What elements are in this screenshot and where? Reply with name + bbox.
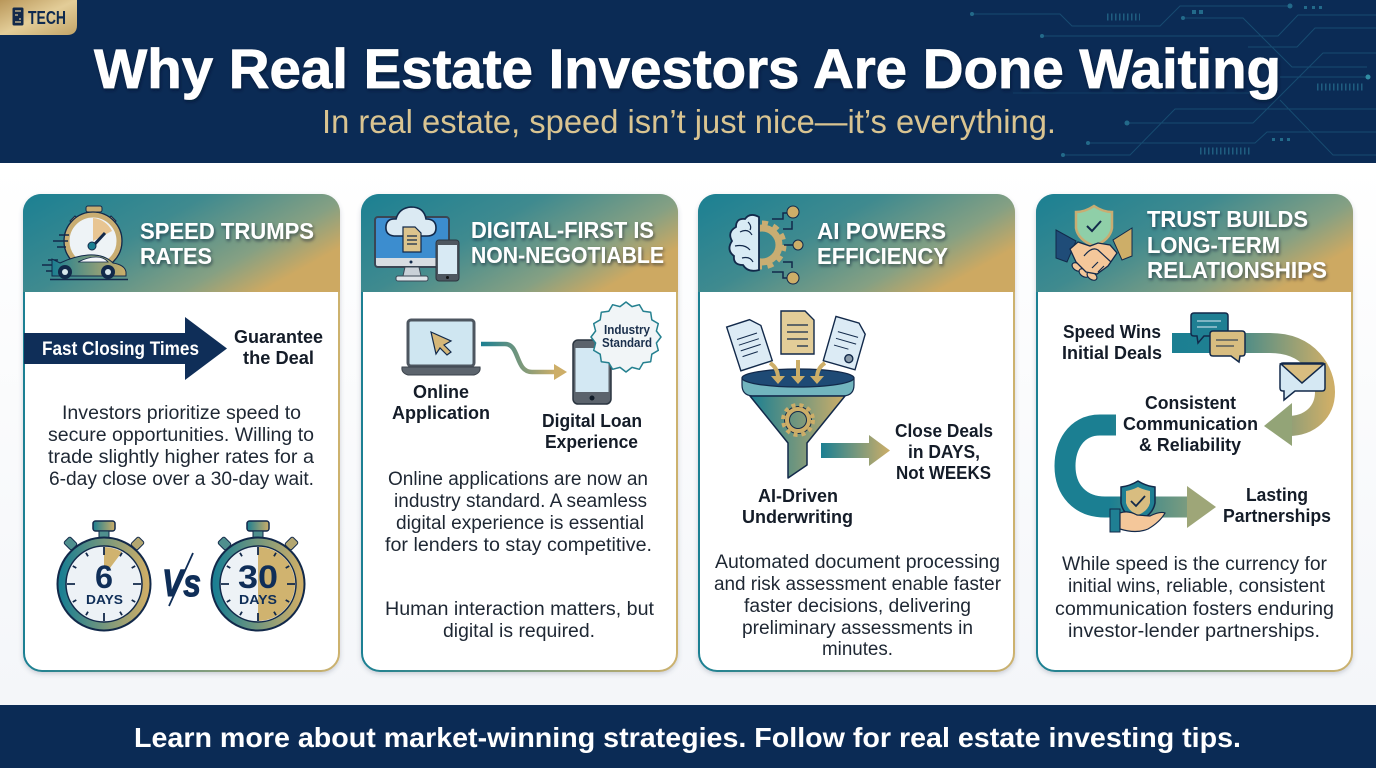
icon: shield and handshake — [1056, 206, 1132, 282]
body text: Automated document processing — [715, 552, 1000, 573]
body text: human interaction — [385, 599, 655, 642]
body text: trade slightly higher rates for a — [48, 447, 314, 468]
label: digital loan experience: Experience — [545, 432, 638, 452]
arrow: fast closing times: Fast Closing Times — [42, 339, 199, 360]
body text: and risk assessment enable faster — [714, 574, 1002, 595]
heading — [817, 218, 948, 269]
body text: While speed is the currency for — [1062, 554, 1328, 575]
stopwatch: 30 days: 30 — [238, 559, 278, 595]
label: speed wins initial deals: Speed Wins — [1063, 322, 1161, 342]
label: close deals: Close Deals — [895, 421, 993, 441]
arrow: online to digital — [481, 344, 567, 380]
label: ai-driven underwriting — [742, 486, 853, 527]
tech badge — [0, 0, 77, 35]
label: guarantee the deal: the Deal — [243, 348, 314, 368]
body text: Online applications are now an — [388, 469, 648, 490]
icon: envelope — [1280, 363, 1325, 400]
badge: industry standard: Standard — [602, 336, 652, 350]
body text: Investors prioritize speed to — [62, 403, 301, 424]
heading — [140, 218, 314, 269]
body text: faster decisions, delivering — [744, 596, 971, 617]
body text: investor-lender partnerships. — [1068, 621, 1320, 642]
label: speed wins initial deals — [1062, 322, 1162, 363]
icon: laptop — [402, 320, 480, 375]
stopwatch: 30 days — [212, 521, 304, 630]
arrow: speed to communication — [1172, 343, 1325, 446]
vs mark: Vs — [162, 563, 201, 605]
heading: AI POWERS — [817, 218, 946, 244]
icon: shield in hand — [1110, 481, 1165, 532]
label: consistent communication: Consistent — [1145, 393, 1236, 413]
body text: preliminary assessments in — [742, 618, 973, 639]
stopwatch: 6 days: 6 — [95, 559, 113, 595]
tech badge: TECH — [28, 8, 66, 28]
arrows into funnel — [770, 360, 825, 384]
header banner — [0, 0, 1376, 163]
heading: LONG-TERM — [1147, 232, 1280, 258]
icon: documents — [727, 311, 868, 371]
label: ai-driven underwriting: AI-Driven — [758, 486, 838, 506]
label: ai-driven underwriting: Underwriting — [742, 507, 853, 527]
body text — [48, 403, 314, 490]
label: speed wins initial deals: Initial Deals — [1062, 343, 1162, 363]
heading — [471, 217, 664, 268]
body text — [714, 552, 1002, 660]
label: digital loan experience: Digital Loan — [542, 411, 642, 431]
arrow: fast closing times — [24, 317, 227, 380]
panel: digital-first — [361, 194, 678, 671]
label: close deals: Not WEEKS — [896, 463, 991, 483]
icon: brain and gear — [729, 206, 803, 284]
label: lasting partnerships: Partnerships — [1223, 506, 1331, 526]
heading: TRUST BUILDS — [1147, 206, 1308, 232]
label: digital loan experience — [542, 411, 642, 452]
label: guarantee the deal — [234, 327, 323, 368]
page background — [0, 163, 1376, 705]
icon: chip — [13, 8, 23, 25]
heading: SPEED TRUMPS — [140, 218, 314, 244]
label: guarantee the deal: Guarantee — [234, 327, 323, 347]
body text: human interaction: Human interaction matters, but — [385, 599, 655, 620]
heading: DIGITAL-FIRST IS — [471, 217, 654, 243]
body text: digital experience is essential — [396, 513, 644, 534]
heading: NON-NEGOTIABLE — [471, 242, 664, 268]
label: online application — [392, 382, 490, 423]
body text: human interaction: digital is required. — [443, 621, 595, 642]
badge: industry standard: Industry — [604, 323, 650, 337]
footer banner — [0, 705, 1376, 768]
label: close deals — [895, 421, 993, 483]
subtitle: In real estate, speed isn’t just nice—it’s everything. — [322, 103, 1056, 140]
icon: funnel — [742, 369, 854, 478]
heading: RATES — [140, 243, 212, 269]
arrow: to close deals — [821, 435, 890, 466]
arrow: communication to partnerships — [1065, 425, 1216, 528]
body text: for lenders to stay competitive. — [385, 535, 652, 556]
stopwatch: 6 days — [58, 521, 150, 630]
label: lasting partnerships: Lasting — [1246, 485, 1308, 505]
body text: secure opportunities. Willing to — [48, 425, 314, 446]
body text: initial wins, reliable, consistent — [1068, 576, 1326, 597]
icon: chat bubbles — [1191, 313, 1245, 362]
badge: industry standard — [591, 302, 661, 372]
stopwatch: 30 days: DAYS — [239, 592, 277, 607]
icon: stopwatch and race car — [42, 206, 128, 280]
label: consistent communication: & Reliability — [1139, 435, 1241, 455]
body text — [1055, 554, 1334, 642]
heading — [1147, 206, 1327, 283]
body text — [385, 469, 652, 556]
panel: ai powers efficiency — [698, 194, 1015, 671]
panel: trust builds relationships — [1036, 194, 1353, 671]
label: consistent communication: Communication — [1123, 414, 1258, 434]
icon: phone — [573, 340, 611, 404]
icon: monitor cloud and phone — [375, 207, 459, 281]
footer banner: Learn more about market-winning strategies. Follow for real estate investing tips. — [134, 722, 1241, 753]
body text: industry standard. A seamless — [394, 491, 647, 512]
label: consistent communication — [1123, 393, 1258, 455]
body text: minutes. — [822, 639, 893, 660]
heading: RELATIONSHIPS — [1147, 257, 1327, 283]
stopwatch: 6 days: DAYS — [86, 592, 123, 607]
heading: EFFICIENCY — [817, 243, 948, 269]
title: Why Real Estate Investors Are Done Waiting — [94, 37, 1281, 100]
circuit pattern — [970, 4, 1376, 157]
label: online application: Application — [392, 403, 490, 423]
body text: communication fosters enduring — [1055, 599, 1334, 620]
label: lasting partnerships — [1223, 485, 1331, 526]
body text: 6-day close over a 30-day wait. — [49, 469, 314, 490]
vs mark — [162, 553, 201, 606]
panel: speed trumps rates — [23, 194, 340, 671]
label: online application: Online — [413, 382, 469, 402]
label: close deals: in DAYS, — [908, 442, 980, 462]
